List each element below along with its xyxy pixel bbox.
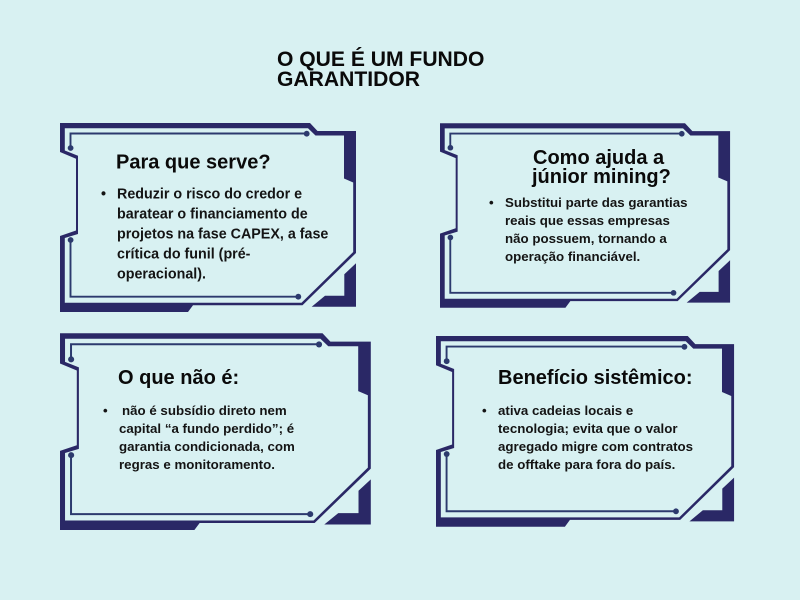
body: beneficio sistemico: agregado migre com contratos bbox=[498, 439, 693, 454]
body: para que serve: crítica do funil (pré- bbox=[117, 246, 251, 262]
body: beneficio sistemico: • bbox=[482, 403, 487, 418]
frame: como ajuda bbox=[440, 123, 730, 308]
frame: para que serve bbox=[60, 123, 356, 312]
body: como ajuda bbox=[489, 195, 688, 264]
heading: como ajuda: Como ajuda a bbox=[533, 147, 665, 169]
heading: o que nao e: O que não é: bbox=[118, 367, 239, 389]
body: beneficio sistemico bbox=[482, 403, 693, 472]
body: o que nao e: regras e monitoramento. bbox=[119, 457, 275, 472]
body: para que serve: • bbox=[101, 186, 106, 202]
title bbox=[277, 48, 484, 91]
panel: como ajuda bbox=[440, 123, 730, 308]
body: para que serve bbox=[101, 186, 328, 282]
body: o que nao e bbox=[103, 403, 295, 472]
panel: o que nao e bbox=[60, 333, 371, 530]
body: para que serve: projetos na fase CAPEX, a fase bbox=[117, 226, 328, 242]
body: como ajuda: operação financiável. bbox=[505, 249, 640, 264]
body: beneficio sistemico: de offtake para fora do país. bbox=[498, 457, 675, 472]
body: o que nao e: garantia condicionada, com bbox=[119, 439, 295, 454]
body: o que nao e: capital “a fundo perdido”; é bbox=[119, 421, 294, 436]
body: para que serve: baratear o financiamento de bbox=[117, 206, 308, 222]
heading: como ajuda bbox=[531, 147, 671, 188]
body: como ajuda: não possuem, tornando a bbox=[505, 231, 667, 246]
body: o que nao e: • bbox=[103, 403, 108, 418]
heading: para que serve: Para que serve? bbox=[116, 152, 271, 174]
body: o que nao e: não é subsídio direto nem bbox=[122, 403, 287, 418]
body: beneficio sistemico: ativa cadeias locais e bbox=[498, 403, 633, 418]
title: O QUE É UM FUNDO bbox=[277, 48, 484, 71]
body: para que serve: operacional). bbox=[117, 266, 206, 282]
frame: o que nao e bbox=[60, 333, 371, 530]
panel: para que serve bbox=[60, 123, 356, 312]
heading: como ajuda: júnior mining? bbox=[531, 166, 671, 188]
frame: beneficio sistemico bbox=[436, 336, 734, 527]
body: como ajuda: Substitui parte das garantias bbox=[505, 195, 688, 210]
body: para que serve: Reduzir o risco do credor e bbox=[117, 186, 302, 202]
panel: beneficio sistemico bbox=[436, 336, 734, 527]
body: beneficio sistemico: tecnologia; evita que o valor bbox=[498, 421, 678, 436]
body: como ajuda: reais que essas empresas bbox=[505, 213, 670, 228]
heading: beneficio sistemico: Benefício sistêmico: bbox=[498, 367, 693, 389]
body: como ajuda: • bbox=[489, 195, 494, 210]
title: GARANTIDOR bbox=[277, 68, 420, 91]
